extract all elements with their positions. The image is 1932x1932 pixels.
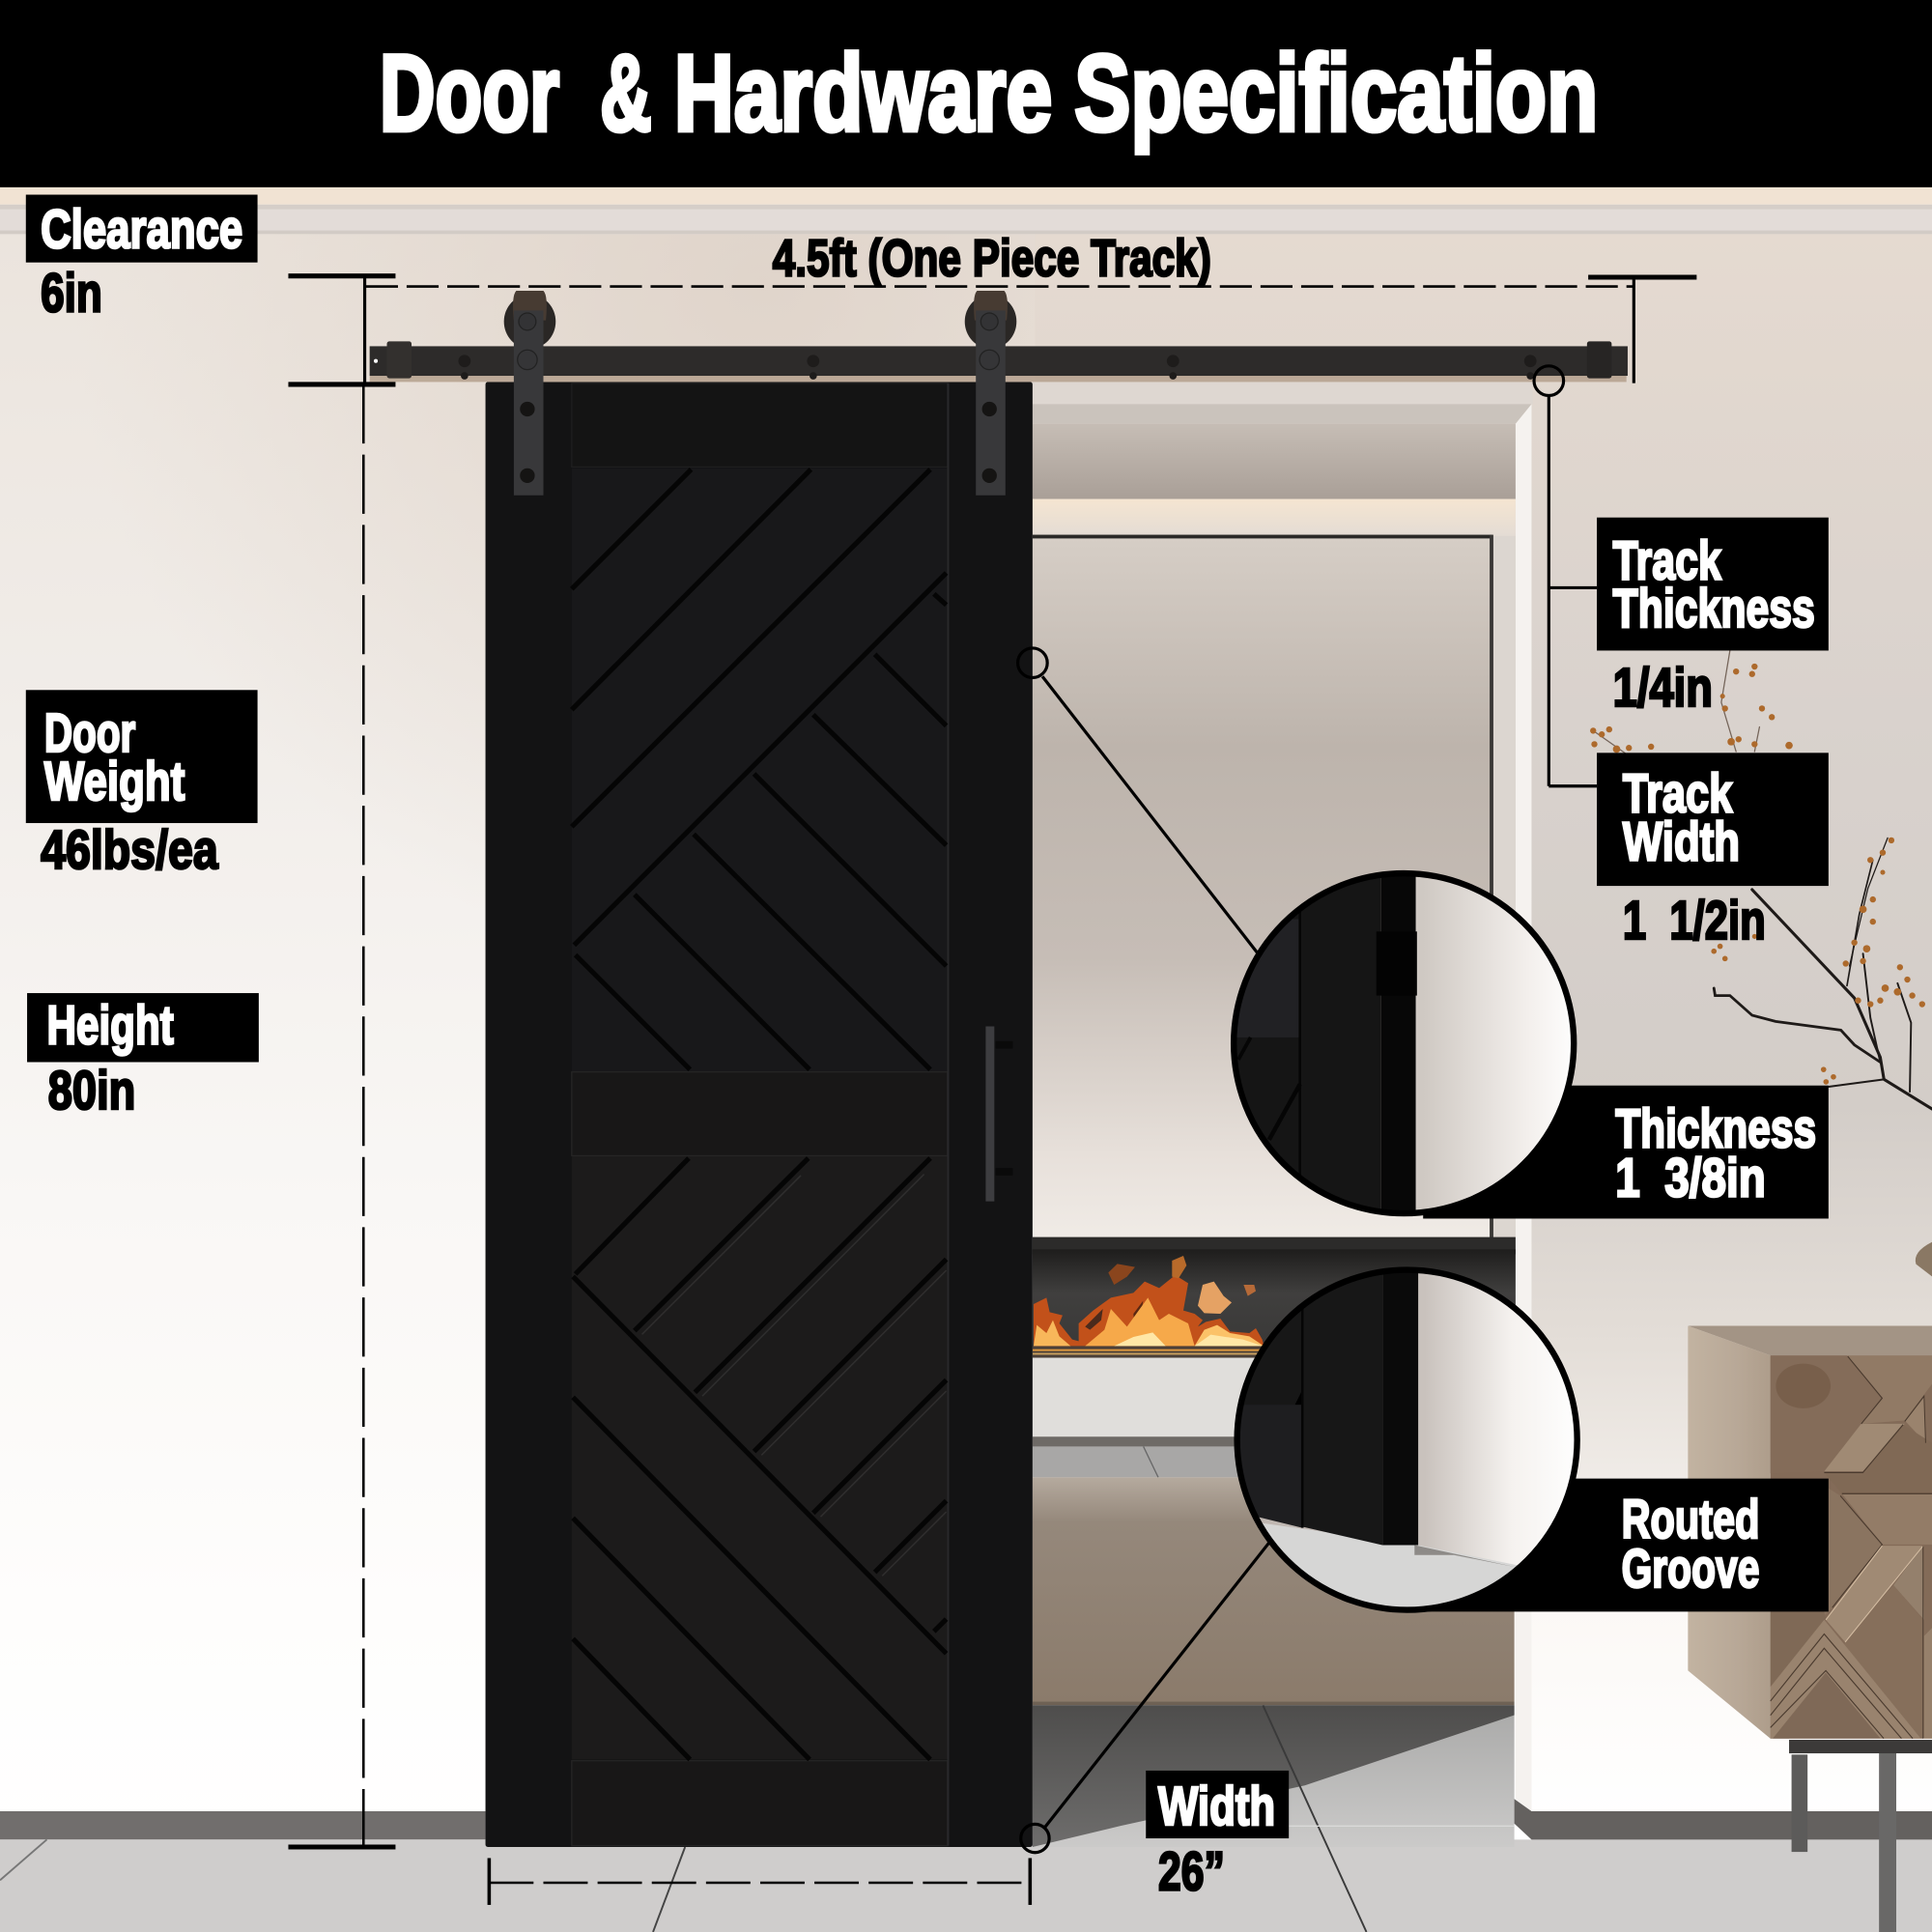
title (380, 32, 1598, 154)
door slab (486, 382, 1033, 1847)
title: Specification (1074, 32, 1598, 154)
spec: height (27, 993, 259, 1121)
cabinet body (1688, 1325, 1932, 1739)
branch with berries (1590, 650, 1932, 1109)
vase edge (1916, 1242, 1932, 1276)
barn door track and hardware (370, 291, 1628, 496)
right wall baseboard (1515, 1799, 1932, 1839)
lower panel (572, 1155, 948, 1759)
spec: track width: 1 1/2in (1623, 890, 1766, 951)
track end stop right (1587, 341, 1611, 379)
lower panel grooves (573, 1158, 947, 1759)
callout leader: routed groove (1021, 1543, 1269, 1853)
middle rail (572, 1072, 948, 1155)
top rail (572, 384, 948, 467)
spec: height: Height (46, 994, 174, 1055)
spec: door weight: 46lbs/ea (41, 819, 218, 880)
bottom rail (572, 1761, 948, 1846)
upper panel grooves (572, 469, 947, 1069)
spec: track thickness: Thickness (1613, 578, 1815, 639)
callout leader: track (1534, 366, 1597, 786)
spec: track width (1597, 753, 1829, 951)
spec: clearance: 6in (41, 263, 102, 324)
wall shadow under track (370, 376, 1627, 382)
spec: height: 80in (48, 1060, 135, 1121)
spec: track thickness: 1/4in (1613, 657, 1713, 718)
title: Hardware (674, 32, 1052, 154)
detail circle: routed groove (1233, 1266, 1582, 1618)
track bar (370, 346, 1628, 376)
spec: width: Width (1158, 1776, 1275, 1836)
title: Door (380, 32, 559, 154)
fireplace flames (1034, 1256, 1264, 1346)
spec: thickness text: 1 3/8in (1615, 1148, 1766, 1208)
spec: width: 26” (1158, 1841, 1225, 1902)
upper panel (572, 469, 948, 1072)
dimension: track length (366, 277, 1696, 384)
spec: track thickness (1597, 518, 1829, 718)
door handle (985, 1026, 1012, 1202)
detail circle: door edge thickness (1233, 868, 1579, 1220)
title: & (600, 32, 652, 154)
spec: thickness text: Thickness (1615, 1097, 1816, 1158)
title band (0, 0, 1932, 187)
spec: clearance: Clearance (41, 198, 242, 259)
cabinet legs (1789, 1740, 1932, 1932)
track end stop left (387, 341, 412, 379)
label box: thickness (1423, 1086, 1829, 1218)
spec: clearance (26, 195, 258, 324)
left roller and strap (504, 291, 555, 496)
door (486, 382, 1033, 1847)
doorway interior (1033, 382, 1533, 1932)
spec: width (1146, 1771, 1289, 1902)
spec: track width: Track (1623, 763, 1733, 824)
track bolts (458, 355, 1537, 380)
spec: thickness text (1615, 1097, 1816, 1208)
dimension: door width (489, 1858, 1030, 1905)
spec: routed groove text: Groove (1622, 1538, 1759, 1599)
right roller and strap (965, 291, 1016, 496)
track length label: 4.5ft (One Piece Track) (773, 231, 1211, 288)
label box: routed groove (1409, 1479, 1829, 1611)
spec: door weight: Door (44, 702, 135, 763)
spec: door weight: Weight (44, 751, 185, 811)
spec: track thickness: Track (1613, 529, 1721, 590)
spec: door weight (26, 690, 258, 880)
spec: track width: Width (1623, 810, 1740, 871)
dimension: door height and clearance (288, 276, 395, 1847)
cabinet (1688, 1242, 1932, 1932)
spec: routed groove text (1622, 1489, 1759, 1599)
lower panel groove highlights (642, 1175, 947, 1576)
callout leader: thickness (1018, 648, 1258, 953)
spec: routed groove text: Routed (1622, 1489, 1759, 1549)
